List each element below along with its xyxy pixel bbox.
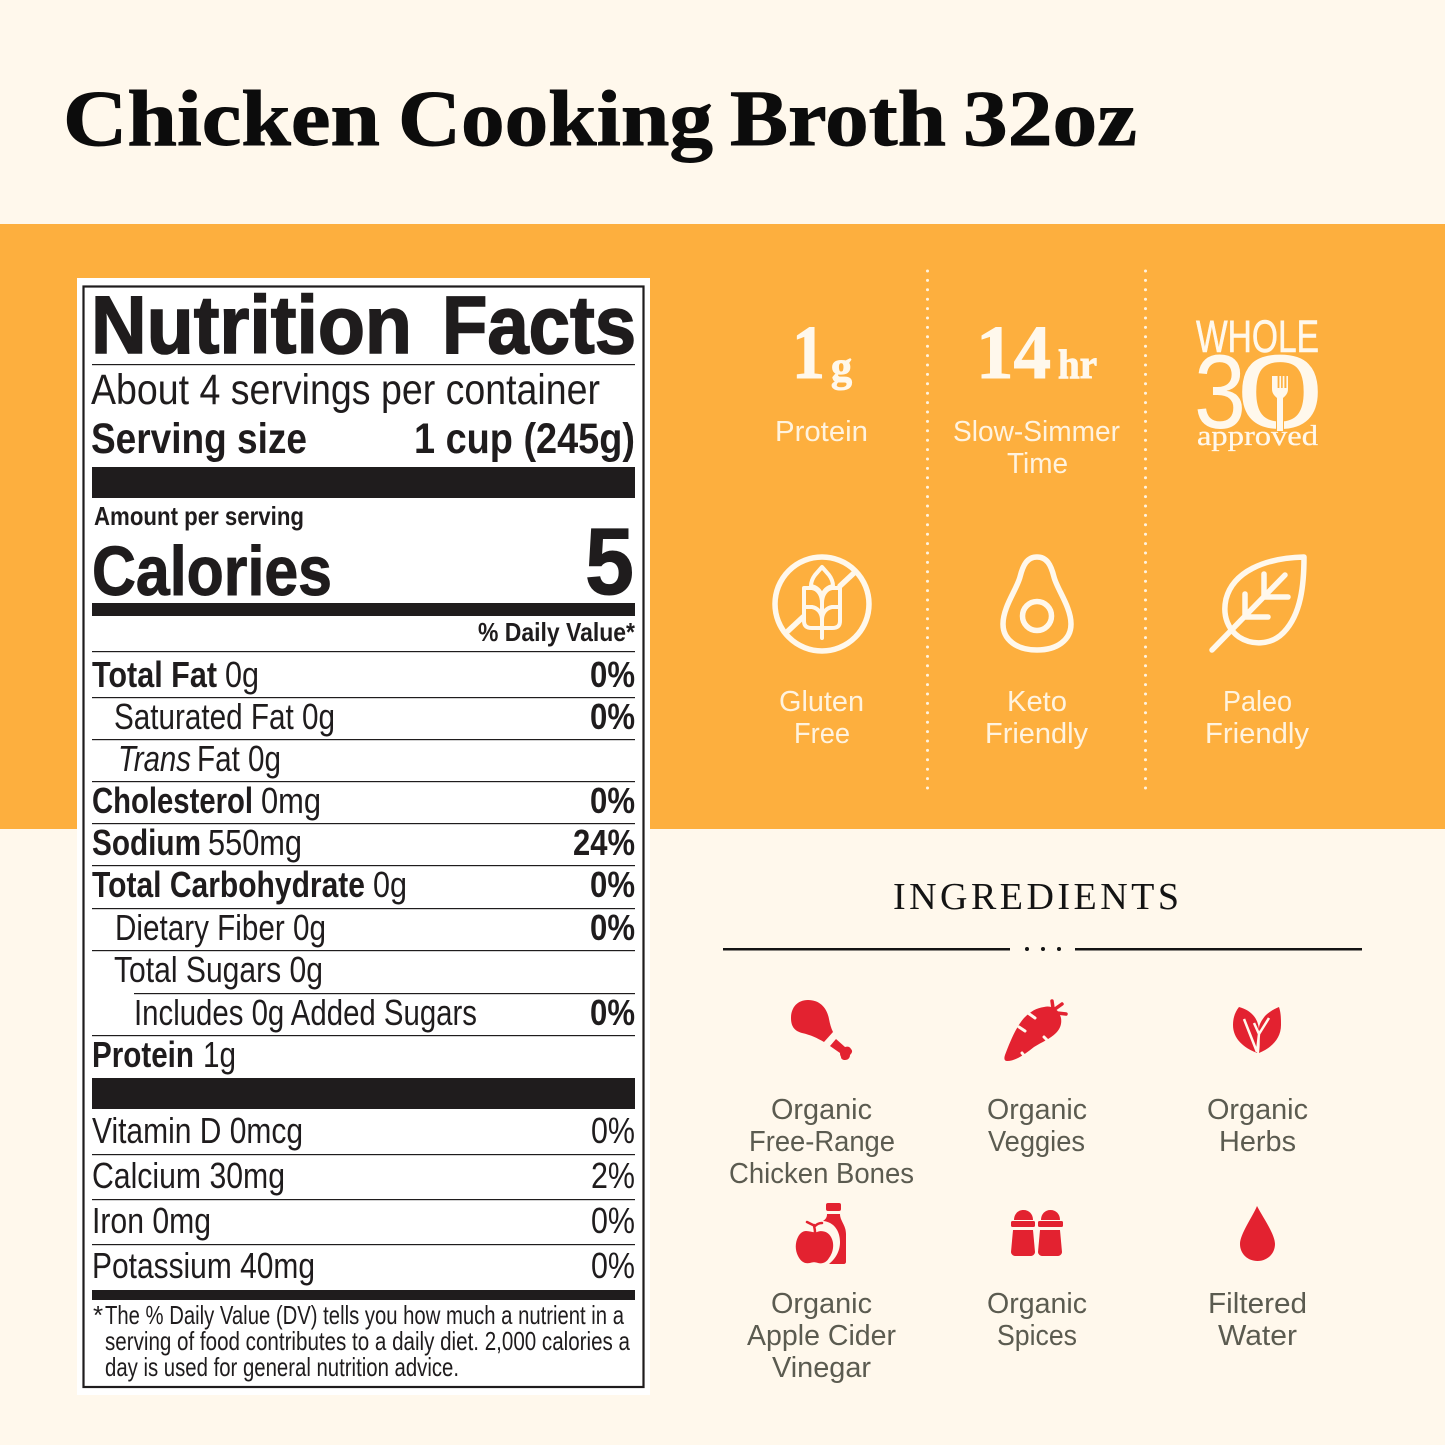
label: organic herbs <box>1207 1094 1308 1158</box>
ingredients heading: INGREDIENTS <box>893 876 1179 918</box>
nutrient rows: 0mg <box>261 780 321 821</box>
label: organic herbs: Herbs <box>1219 1126 1296 1158</box>
stat: protein: g <box>831 345 852 391</box>
calories: 5 <box>585 509 634 615</box>
label: apple cider vinegar: Vinegar <box>772 1352 871 1384</box>
label: organic veggies <box>987 1094 1087 1158</box>
nutrient rows: Includes 0g Added Sugars <box>134 992 477 1033</box>
label: organic herbs: Organic <box>1207 1094 1308 1126</box>
label: apple cider vinegar: Organic <box>771 1288 872 1320</box>
logo: whole30 approved: WHOLE <box>1196 311 1319 362</box>
nutrient rows: 0g <box>373 864 407 905</box>
nutrient rows: 550mg <box>208 822 302 863</box>
logo: whole30 approved: 3 <box>1194 334 1246 451</box>
vitamin rows: Iron 0mg <box>92 1200 211 1241</box>
nutrient rows: Fat 0g <box>197 738 281 779</box>
vitamin rows: 0% <box>591 1110 635 1151</box>
vitamin rows: 0% <box>591 1200 635 1241</box>
label: chicken bones: Chicken Bones <box>729 1158 914 1190</box>
nutrient rows: Protein <box>92 1034 194 1075</box>
label: gluten free: Gluten <box>779 686 864 718</box>
nutrient rows: 0g <box>225 654 259 695</box>
nutrition heading: Facts <box>442 280 636 371</box>
label: apple cider vinegar <box>747 1288 896 1384</box>
label: gluten free: Free <box>794 718 850 750</box>
stat: slow-simmer time: 14 <box>976 311 1051 395</box>
label: paleo friendly <box>1205 686 1309 750</box>
vitamin rows: Potassium 40mg <box>92 1245 315 1286</box>
label: apple cider vinegar: Apple Cider <box>747 1320 896 1352</box>
nutrient rows: Total Carbohydrate <box>92 864 365 905</box>
label: organic spices: Spices <box>997 1320 1077 1352</box>
nutrient rows: Sodium <box>92 822 201 863</box>
label: filtered water: Filtered <box>1208 1288 1307 1320</box>
calories: Amount per serving <box>94 501 304 531</box>
nutrient rows: Total Fat <box>92 654 217 695</box>
nutrition heading <box>91 280 636 371</box>
icon: gluten free <box>775 557 869 651</box>
icon: spice shakers <box>1011 1210 1063 1256</box>
logo: whole30 approved <box>1194 311 1324 452</box>
nutrient rows <box>92 651 635 1075</box>
title: 32oz <box>963 76 1137 163</box>
title: Broth <box>730 76 946 163</box>
vitamin rows: 2% <box>591 1155 635 1196</box>
footnote: serving of food contributes to a daily diet. 2,000 calories a <box>105 1326 630 1356</box>
title <box>63 76 1137 163</box>
icon: water drop <box>1240 1206 1275 1261</box>
nutrient rows: Total Sugars 0g <box>114 949 323 990</box>
logo: whole30 approved: 0 <box>1236 334 1324 451</box>
icon: avocado <box>1003 557 1071 650</box>
nutrient rows: 0% <box>590 864 635 905</box>
footnote: * <box>93 1300 103 1330</box>
servings: 1 cup (245g) <box>414 415 635 463</box>
label: filtered water <box>1208 1288 1307 1352</box>
daily value header: % Daily Value* <box>478 617 636 647</box>
nutrient rows: 0% <box>590 696 635 737</box>
icon: leaf <box>1212 557 1304 650</box>
vitamin rows: 0% <box>591 1245 635 1286</box>
label: paleo friendly: Friendly <box>1205 718 1309 750</box>
label: filtered water: Water <box>1218 1320 1297 1352</box>
nutrient rows: Trans <box>118 738 191 779</box>
title: Chicken <box>63 76 380 163</box>
vitamin rows: Calcium 30mg <box>92 1155 285 1196</box>
label: keto friendly: Keto <box>1007 686 1067 718</box>
label: chicken bones: Free-Range <box>749 1126 895 1158</box>
nutrient rows: 0% <box>590 992 635 1033</box>
footnote: The % Daily Value (DV) tells you how much a nutrient in a <box>105 1300 624 1330</box>
logo: whole30 approved: approved <box>1197 421 1318 452</box>
label: keto friendly: Friendly <box>985 718 1088 750</box>
nutrient rows: Cholesterol <box>92 780 253 821</box>
stat: protein: 1 <box>792 311 825 395</box>
label: organic spices: Organic <box>987 1288 1087 1320</box>
label: gluten free <box>779 686 864 750</box>
stat: slow-simmer time: Time <box>1007 448 1068 480</box>
vitamin rows <box>92 1110 635 1286</box>
label: chicken bones <box>729 1094 914 1190</box>
icon: apple and bottle <box>796 1203 846 1264</box>
icon: carrot <box>1004 1001 1066 1061</box>
footnote: day is used for general nutrition advice. <box>105 1352 459 1382</box>
nutrient rows: 0% <box>590 907 635 948</box>
calories: Calories <box>92 532 332 610</box>
nutrition heading: Nutrition <box>91 280 412 371</box>
calories <box>92 501 634 615</box>
servings: Serving size <box>91 415 307 463</box>
stat: slow-simmer time: hr <box>1058 341 1097 387</box>
servings: About 4 servings per container <box>91 366 600 414</box>
vitamin rows: Vitamin D 0mcg <box>92 1110 303 1151</box>
stat: slow-simmer time <box>953 311 1120 480</box>
label: organic veggies: Veggies <box>988 1126 1085 1158</box>
panel: nutrition facts <box>77 278 650 1395</box>
stat: protein <box>775 311 868 448</box>
title: Cooking <box>398 76 713 163</box>
nutrient rows: Dietary Fiber 0g <box>115 907 326 948</box>
label: paleo friendly: Paleo <box>1223 686 1292 718</box>
nutrient rows: 1g <box>203 1034 236 1075</box>
footnote <box>93 1300 630 1382</box>
label: organic veggies: Organic <box>987 1094 1087 1126</box>
label: keto friendly <box>985 686 1088 750</box>
nutrient rows: 0% <box>590 654 635 695</box>
stat: protein: Protein <box>775 416 868 448</box>
stat: slow-simmer time: Slow-Simmer <box>953 416 1120 448</box>
icon: chicken leg <box>791 1000 852 1060</box>
nutrient rows: Saturated Fat 0g <box>114 696 335 737</box>
label: organic spices <box>987 1288 1087 1352</box>
label: chicken bones: Organic <box>771 1094 872 1126</box>
orange band <box>0 224 1445 829</box>
servings <box>91 366 635 463</box>
ingredients divider <box>723 947 1362 951</box>
nutrient rows: 0% <box>590 780 635 821</box>
icon: herbs <box>1233 1007 1281 1053</box>
nutrient rows: 24% <box>573 822 635 863</box>
